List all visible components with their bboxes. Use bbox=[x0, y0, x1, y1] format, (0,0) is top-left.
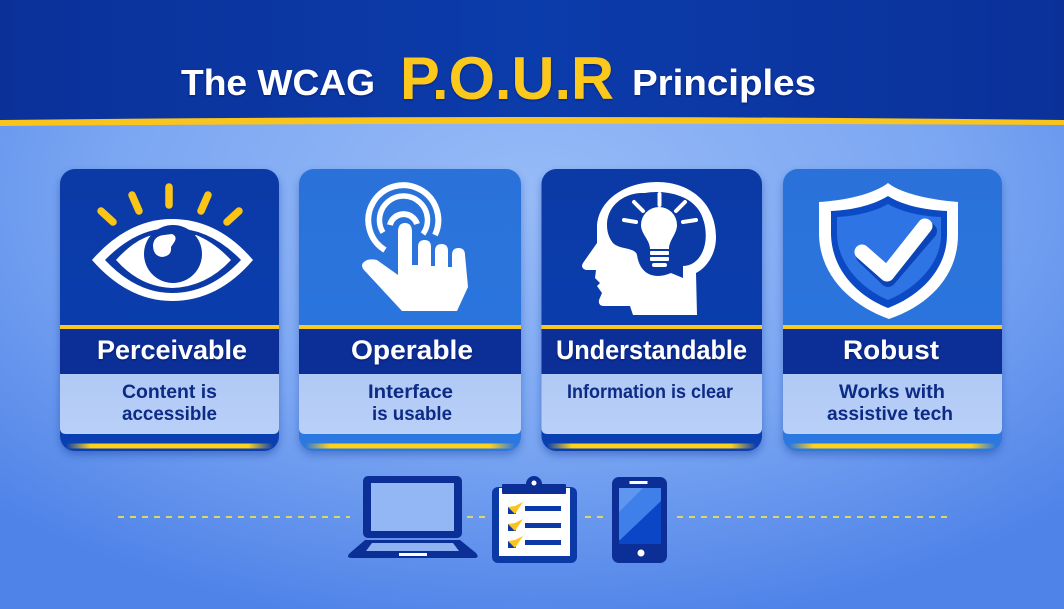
heading: Operable: Operable bbox=[351, 335, 473, 365]
text: Interface is usable: Interface bbox=[368, 382, 453, 403]
text: Works with assistive tech: assistive tech bbox=[827, 404, 953, 425]
header gold rule bbox=[0, 117, 1064, 126]
icon: laptop bbox=[348, 476, 478, 558]
icon: clipboard checklist bbox=[492, 476, 577, 563]
dashed connector line bbox=[118, 516, 950, 518]
title: Principles bbox=[632, 62, 816, 103]
text: Works with assistive tech: Works with bbox=[839, 382, 945, 403]
text: Interface is usable bbox=[368, 382, 453, 425]
checklist rows bbox=[508, 502, 561, 548]
icon: smartphone bbox=[612, 477, 667, 563]
icon: shield with check mark bbox=[819, 183, 958, 319]
icon: tapping hand bbox=[362, 185, 468, 311]
icon: head with light bulb bbox=[582, 182, 716, 315]
panel: Robust bbox=[783, 169, 1002, 455]
panel: Perceivable bbox=[60, 169, 279, 455]
title bbox=[181, 45, 816, 112]
panel: Operable bbox=[299, 169, 521, 455]
text: Interface is usable: is usable bbox=[372, 404, 452, 425]
heading: Understandable: Understandable bbox=[556, 335, 747, 365]
text: Content is accessible: Content is bbox=[122, 382, 217, 403]
title: P.O.U.R bbox=[400, 45, 614, 112]
text: Content is accessible bbox=[122, 382, 217, 425]
text: Information is clear: Information is clear bbox=[567, 382, 734, 403]
title: The WCAG bbox=[181, 62, 375, 103]
text: Works with assistive tech bbox=[827, 382, 953, 425]
heading: Robust: Robust bbox=[843, 335, 939, 365]
text: Content is accessible: accessible bbox=[122, 404, 217, 425]
header banner bbox=[0, 0, 1064, 122]
heading: Perceivable: Perceivable bbox=[97, 335, 247, 365]
icon: eye with rays bbox=[92, 187, 253, 301]
panel: Understandable bbox=[542, 169, 762, 455]
